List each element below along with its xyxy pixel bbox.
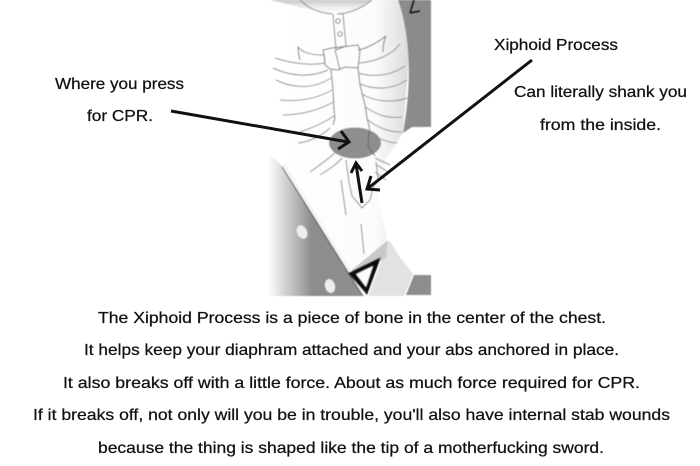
label: where you press for CPR: for CPR. — [87, 108, 153, 125]
explanatory paragraph: The Xiphoid Process is a piece of bone in the center of the chest. — [98, 310, 606, 327]
label: can literally shank you: from the inside. — [540, 117, 661, 134]
arrow: to xiphoid process — [367, 60, 532, 190]
explanatory paragraph: It helps keep your diaphram attached and your abs anchored in place. — [84, 342, 619, 359]
dark jacket right — [398, 0, 431, 133]
arrow: xiphoid pointing upward — [351, 163, 362, 203]
collar and placket — [270, 0, 372, 16]
left ribs — [273, 58, 346, 215]
explanatory paragraph — [33, 310, 670, 457]
jacket left — [268, 152, 364, 296]
arrow: to CPR press zone — [171, 111, 349, 149]
explanatory paragraph: If it breaks off, not only will you be in trouble, you'll also have internal stab wounds — [33, 407, 670, 424]
label: where you press for CPR — [55, 76, 184, 125]
label: can literally shank you: Can literally shank you — [514, 84, 687, 101]
jacket buttons — [295, 224, 337, 294]
label: xiphoid process: Xiphoid Process — [494, 37, 618, 54]
shirt shading — [352, 240, 388, 276]
small white hand area — [395, 128, 431, 146]
label: can literally shank you — [514, 84, 687, 134]
illustration: manga chest with exposed sternum — [268, 0, 431, 296]
jacket lapel line — [284, 165, 364, 294]
sternum outline — [298, 36, 386, 130]
explanatory paragraph: because the thing is shaped like the tip of a motherfucking sword. — [98, 440, 604, 457]
CPR press zone — [329, 128, 381, 158]
shirt torso — [270, 0, 410, 294]
explanatory paragraph: It also breaks off with a little force. About as much force required for CPR. — [63, 375, 640, 392]
label: where you press for CPR: Where you press — [55, 76, 184, 93]
black shadow triangle — [348, 257, 381, 295]
right ribs — [358, 44, 407, 180]
lower right coat panels — [368, 240, 413, 296]
xiphoid tip outline — [346, 160, 378, 254]
